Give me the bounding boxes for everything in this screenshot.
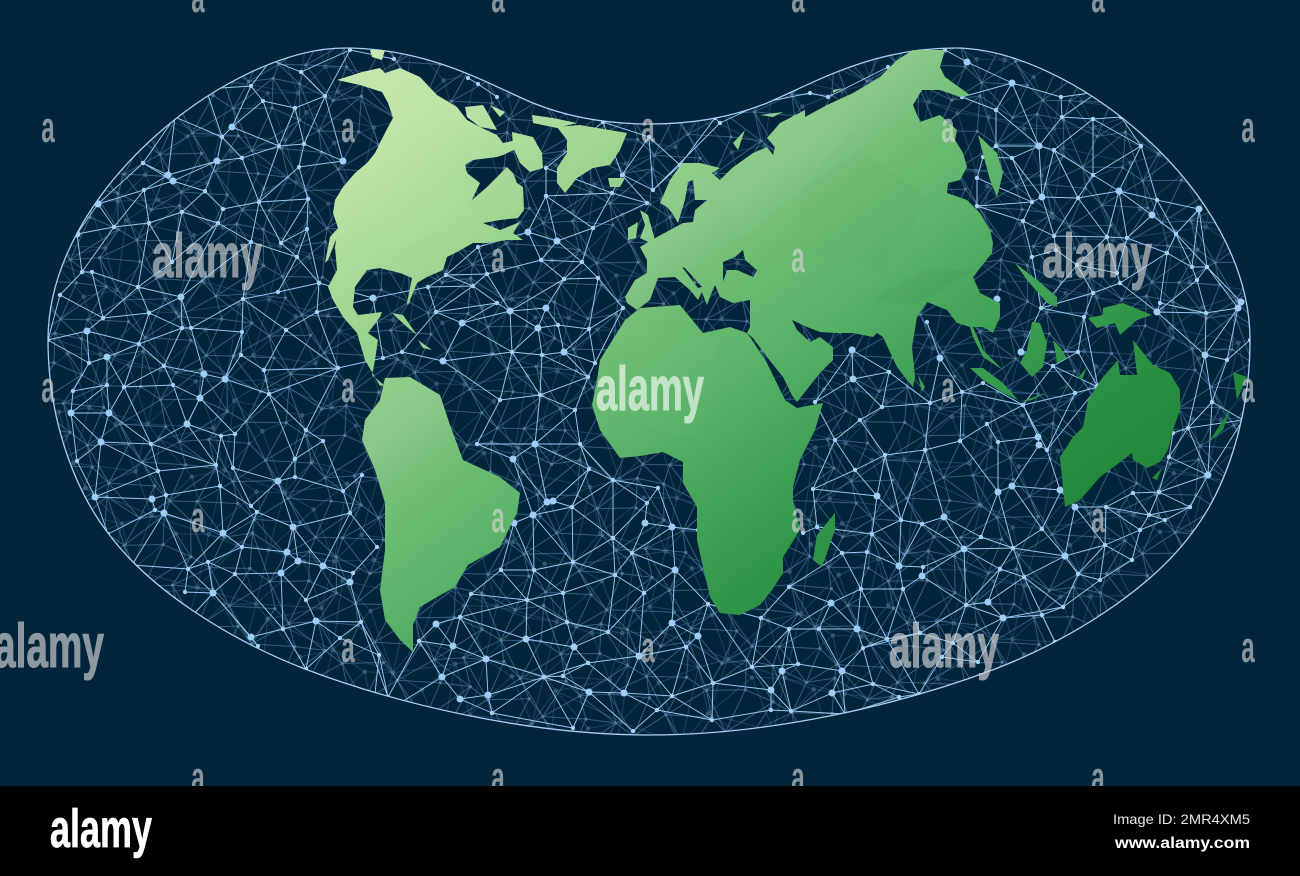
watermark: small letter marks: a [1241, 622, 1255, 672]
watermark: small letter marks: a [341, 622, 355, 672]
watermark: small letter marks: a [41, 362, 55, 412]
watermark: large alamy text: alamy [889, 612, 999, 681]
Southeast Asian islands [970, 263, 1087, 402]
British Isles [628, 210, 655, 243]
Greenland [557, 125, 627, 193]
watermark: small letter marks: a [1091, 752, 1105, 802]
South America [362, 377, 520, 652]
second fine mesh layer [48, 48, 1250, 735]
network mesh clipped to map outline [48, 48, 1250, 735]
New Guinea [1088, 303, 1152, 335]
map outline [48, 48, 1250, 735]
footer logo: alamy [50, 799, 152, 859]
fine background mesh [48, 48, 1250, 735]
Australia [1060, 340, 1180, 507]
watermark: small letter marks: a [641, 102, 655, 152]
Eurasia [625, 50, 1003, 402]
watermark: small letter marks: a [41, 102, 55, 152]
watermark: small letter marks: a [341, 102, 355, 152]
Baja California [325, 228, 338, 263]
footer bar [0, 786, 1300, 876]
image id: Image ID: 2MR4XM5 [1113, 811, 1250, 827]
bright mesh: Indian Ocean and Pacific east [708, 322, 1078, 720]
bright mesh: Pacific right [945, 50, 1250, 642]
Africa [592, 305, 823, 615]
watermark: small letter marks: a [941, 362, 955, 412]
Tasmania [1152, 468, 1162, 480]
watermark: large alamy text: alamy [152, 222, 262, 291]
watermark: small letter marks: a [191, 752, 205, 802]
watermark: small letter marks: a [791, 492, 805, 542]
continents [325, 50, 1247, 652]
website: www.alamy.com [1114, 835, 1250, 852]
watermark: large alamy text [0, 222, 1152, 681]
watermark: large alamy text: alamy [596, 355, 704, 424]
Japan and Sakhalin [978, 135, 1003, 197]
watermark: small letter marks: a [791, 752, 805, 802]
bright mesh: Atlantic [301, 50, 888, 731]
Iceland [608, 178, 625, 187]
Sri Lanka [918, 375, 925, 392]
watermark: small letter marks: a [491, 232, 505, 282]
watermark: small letter marks: a [491, 752, 505, 802]
North America [328, 68, 524, 386]
Caribbean islands [392, 313, 432, 350]
watermark: small letter marks: a [641, 622, 655, 672]
watermark: small letter marks: a [491, 492, 505, 542]
Madagascar [813, 513, 835, 567]
watermark: small letter marks: a [791, 232, 805, 282]
watermark: large alamy text: alamy [1042, 222, 1152, 291]
watermark: small letter marks: a [1241, 362, 1255, 412]
watermark: small letter marks: a [191, 492, 205, 542]
watermark: small letter marks: a [1241, 102, 1255, 152]
bright mesh lines and nodes [48, 60, 388, 697]
Russian Arctic islands [733, 88, 843, 150]
watermark: small letter marks: a [941, 102, 955, 152]
low-poly facets on land [350, 120, 975, 440]
watermark: small letter marks: a [1091, 492, 1105, 542]
watermark: small letter marks: a [341, 362, 355, 412]
large network nodes [71, 62, 1241, 699]
Arctic islands [370, 50, 577, 172]
New Zealand [1208, 372, 1247, 443]
